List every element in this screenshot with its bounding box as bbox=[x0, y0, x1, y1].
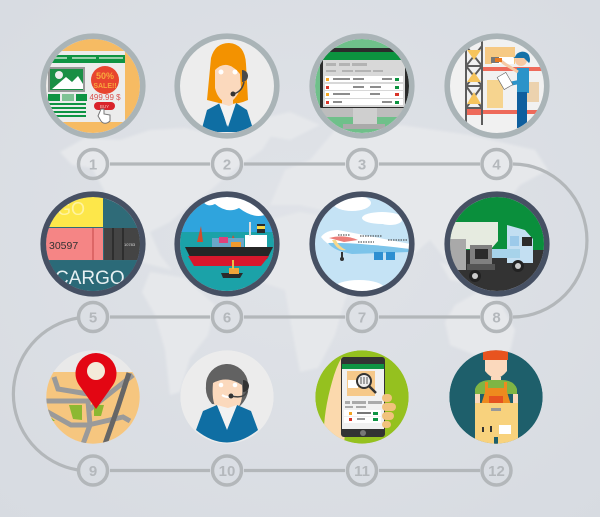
price: 499.99 $ bbox=[89, 93, 121, 102]
step 10: male operator bbox=[180, 350, 274, 444]
sale badge: SALE!! bbox=[93, 83, 117, 90]
badge 12 bbox=[482, 456, 511, 485]
step 4: warehouse worker bbox=[447, 36, 547, 136]
worker bbox=[495, 52, 530, 128]
step 3: monitor dashboard bbox=[312, 36, 412, 136]
tugboat bbox=[221, 260, 243, 278]
step 5: cargo containers: 30597 bbox=[49, 240, 78, 252]
magnifier bbox=[357, 374, 376, 393]
badge 1: 1 bbox=[89, 156, 97, 174]
sale badge: 50% bbox=[96, 71, 114, 81]
badge 6 bbox=[212, 302, 242, 332]
step 2: female operator bbox=[177, 36, 277, 136]
badge 2: 2 bbox=[223, 156, 231, 174]
step 7: airplane bbox=[312, 194, 412, 296]
step 11: phone scanner in hand bbox=[315, 350, 409, 447]
step 5: cargo containers: CARGO bbox=[55, 268, 125, 289]
cursor hand bbox=[98, 109, 110, 123]
badge 4: 4 bbox=[492, 156, 501, 174]
step 5: cargo containers bbox=[43, 194, 143, 294]
step 5: cargo containers: 10783 bbox=[124, 242, 136, 247]
headset bbox=[228, 380, 249, 398]
step 9: map with pin bbox=[46, 350, 140, 444]
badge 11: 11 bbox=[354, 463, 370, 480]
step 5: cargo containers: GO bbox=[57, 199, 85, 219]
badge 1 bbox=[78, 150, 108, 178]
badge 5: 5 bbox=[89, 310, 97, 326]
buy button: BUY bbox=[100, 104, 109, 109]
badge 11 bbox=[348, 456, 376, 485]
badge 10 bbox=[212, 456, 242, 485]
product image bbox=[48, 67, 85, 92]
headset bbox=[230, 70, 248, 96]
sale badge bbox=[91, 66, 119, 94]
badge 12: 12 bbox=[488, 463, 505, 480]
badge 2 bbox=[212, 150, 242, 178]
badge 5 bbox=[78, 302, 108, 332]
badge 10: 10 bbox=[219, 463, 235, 480]
location pin bbox=[76, 353, 116, 409]
badge 9: 9 bbox=[89, 463, 97, 480]
badge 7 bbox=[348, 302, 376, 332]
badge 3: 3 bbox=[358, 156, 366, 174]
badge 3 bbox=[348, 150, 376, 178]
badge 8 bbox=[482, 302, 511, 332]
badge 7: 7 bbox=[358, 310, 366, 326]
world map background bbox=[60, 112, 548, 395]
rack bbox=[466, 40, 482, 125]
step 8: trucks bbox=[447, 194, 547, 294]
timeline path bbox=[13, 164, 587, 470]
step 12: courier with box bbox=[449, 350, 543, 446]
step 6: container ship bbox=[177, 194, 277, 294]
step 1: online shop page bbox=[43, 36, 143, 136]
badge 8: 8 bbox=[492, 310, 501, 326]
numbered step badges bbox=[78, 150, 511, 485]
badge 6: 6 bbox=[223, 310, 231, 326]
badge 9 bbox=[78, 456, 108, 485]
badge 4 bbox=[482, 150, 511, 178]
